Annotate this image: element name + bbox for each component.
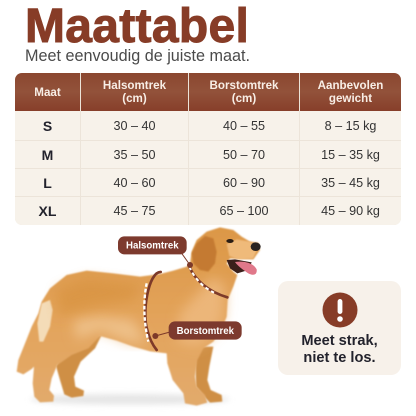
tongue <box>235 262 257 275</box>
callout text <box>301 333 378 366</box>
table header: Halsomtrek <box>81 73 188 111</box>
row S: 40 – 55 <box>223 118 265 132</box>
row M <box>15 141 401 168</box>
row S <box>15 111 401 140</box>
table header: Halsomtrek: (cm) <box>122 92 147 105</box>
label: Borstomtrek: Borstomtrek <box>177 326 235 337</box>
row M: 50 – 70 <box>223 148 265 162</box>
table header: Borstomtrek: (cm) <box>232 92 256 105</box>
label: Borstomtrek <box>152 321 242 340</box>
muzzle <box>227 239 258 259</box>
label: Halsomtrek <box>118 236 193 268</box>
row L <box>15 169 401 196</box>
table header: Halsomtrek: Halsomtrek <box>103 79 166 92</box>
chest measuring tape <box>144 272 161 350</box>
callout text: Meet strak, <box>301 333 378 349</box>
body and head <box>17 227 260 406</box>
subtitle: Meet eenvoudig de juiste maat. <box>25 47 250 65</box>
mouth <box>227 259 252 273</box>
table header: Borstomtrek <box>189 73 299 111</box>
row L: 35 – 45 kg <box>321 176 380 190</box>
dog illustration with measurement labels <box>16 226 261 407</box>
size table <box>15 73 401 225</box>
row L: 60 – 90 <box>223 176 265 190</box>
nose <box>251 242 261 251</box>
table header: Maat <box>15 73 80 111</box>
title: Maattabel <box>25 0 249 53</box>
row L: 40 – 60 <box>113 176 156 190</box>
label: Halsomtrek: Halsomtrek <box>126 241 179 252</box>
neck measuring tape <box>189 267 227 297</box>
dog <box>17 227 261 406</box>
icon: exclamation mark <box>322 292 358 328</box>
eye <box>226 239 234 243</box>
row XL <box>15 197 401 225</box>
table header: Aanbevolen gewicht: gewicht <box>329 92 372 105</box>
row S: 30 – 40 <box>113 118 156 132</box>
row XL: XL <box>39 203 56 219</box>
row XL: 65 – 100 <box>219 204 269 218</box>
callout text: niet te los. <box>303 350 376 366</box>
table header: Aanbevolen gewicht: Aanbevolen <box>318 79 383 92</box>
row XL: 45 – 90 kg <box>321 204 380 218</box>
body light fur <box>73 317 147 343</box>
callout: measure tightly <box>278 281 401 375</box>
row M: 35 – 50 <box>113 148 156 162</box>
row S: 8 – 15 kg <box>325 118 376 132</box>
ground shadow <box>30 394 230 405</box>
table header: Aanbevolen gewicht <box>300 73 401 111</box>
table header: Maat: Maat <box>34 86 61 98</box>
flank shading <box>57 278 140 317</box>
table header: Borstomtrek: Borstomtrek <box>210 79 278 92</box>
row XL: 45 – 75 <box>113 204 156 218</box>
pale rump <box>37 300 53 342</box>
row M: M <box>42 146 53 162</box>
ear <box>192 236 217 272</box>
row M: 15 – 35 kg <box>321 148 380 162</box>
row S: S <box>43 118 52 134</box>
far legs <box>56 335 222 403</box>
chest light fur <box>177 277 225 347</box>
row L: L <box>43 174 52 190</box>
